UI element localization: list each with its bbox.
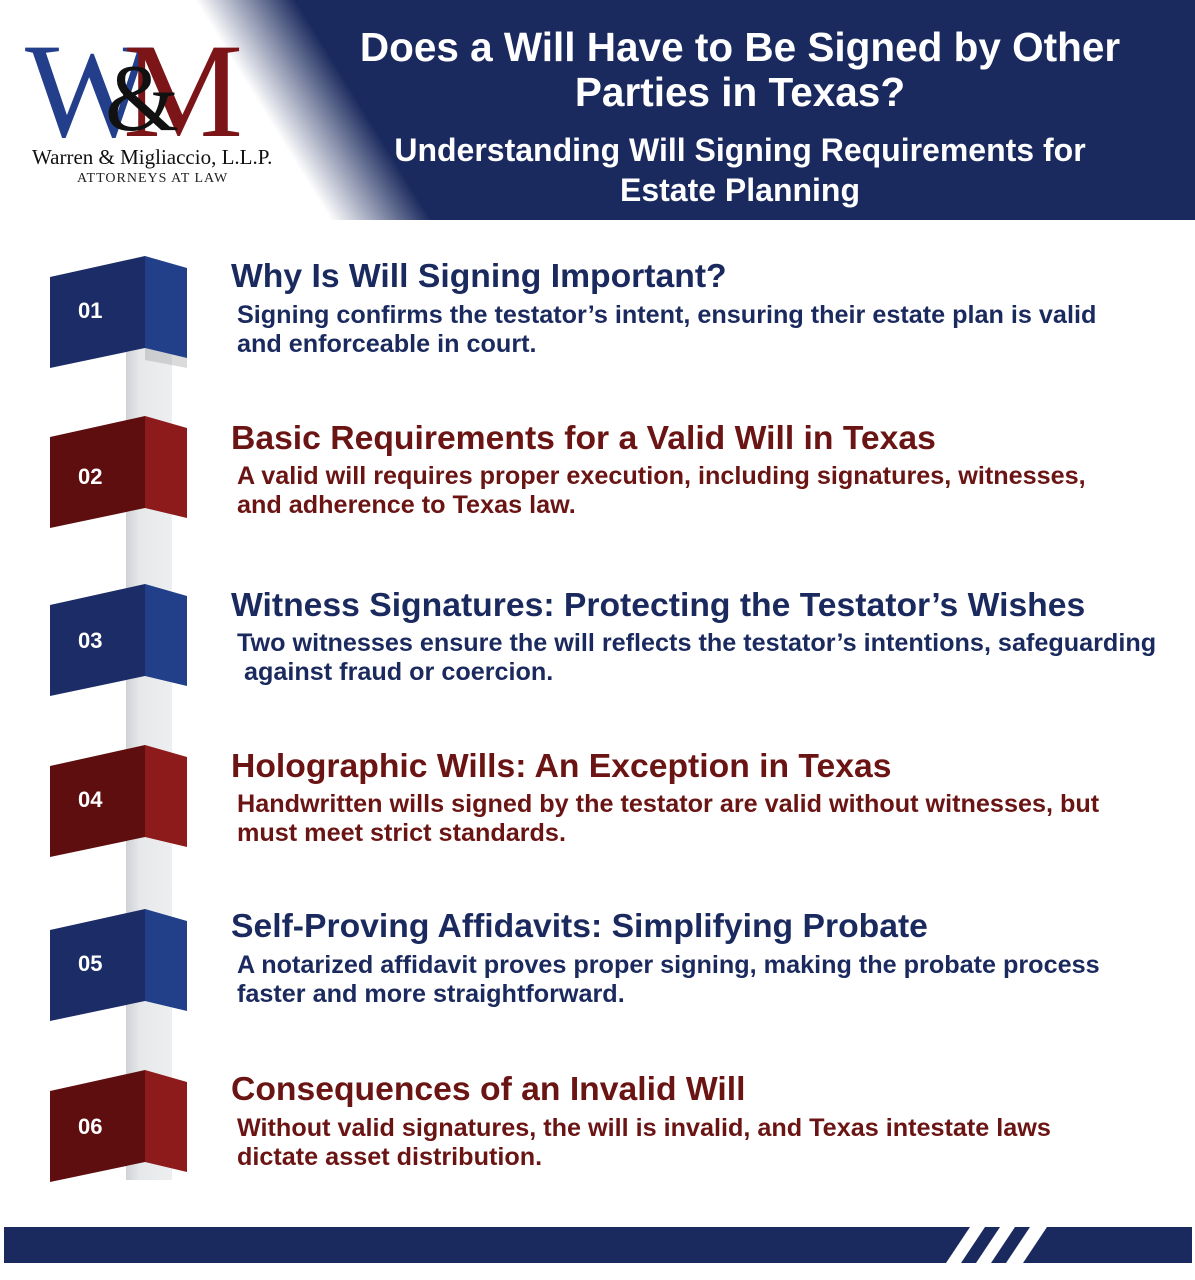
text 04: Handwritten wills signed by the testator are valid without witnesses, but <box>237 790 1099 818</box>
heading 04: Holographic Wills: An Exception in Texas <box>231 747 891 785</box>
marker 06 <box>50 1070 187 1182</box>
marker 02: 02 <box>78 464 102 489</box>
text 01: and enforceable in court. <box>237 330 537 358</box>
text 03: Two witnesses ensure the will reflects the testator’s intentions, safeguarding <box>237 629 1156 657</box>
text 04: must meet strict standards. <box>237 818 566 846</box>
marker 06: 06 <box>78 1114 102 1139</box>
subtitle: Estate Planning <box>620 172 860 208</box>
marker 04: 04 <box>78 787 103 812</box>
text 03: against fraud or coercion. <box>244 658 553 686</box>
subtitle <box>394 132 1086 208</box>
footer bar <box>4 1227 1192 1263</box>
heading 01: Why Is Will Signing Important? <box>231 257 727 295</box>
logo <box>25 30 272 186</box>
timeline pillar <box>126 300 172 1180</box>
marker 05 <box>50 909 187 1021</box>
title: Parties in Texas? <box>575 69 905 115</box>
marker 01: 01 <box>78 298 102 323</box>
heading 02: Basic Requirements for a Valid Will in Texas <box>231 419 936 457</box>
title: Does a Will Have to Be Signed by Other <box>360 24 1120 70</box>
title <box>360 24 1120 115</box>
text 06: Without valid signatures, the will is invalid, and Texas intestate laws <box>237 1114 1051 1142</box>
marker 01 <box>50 256 187 368</box>
marker 04 <box>50 745 187 857</box>
heading 06: Consequences of an Invalid Will <box>231 1070 745 1108</box>
marker 02 <box>50 416 187 528</box>
text 01 <box>237 301 1096 358</box>
text 02: and adherence to Texas law. <box>237 490 576 518</box>
logo: ATTORNEYS AT LAW <box>77 171 228 186</box>
text 06 <box>237 1114 1051 1170</box>
heading 05: Self-Proving Affidavits: Simplifying Probate <box>231 907 928 945</box>
text 05 <box>237 951 1100 1008</box>
text 02: A valid will requires proper execution, including signatures, witnesses, <box>237 462 1086 490</box>
text 05: faster and more straightforward. <box>237 980 625 1008</box>
logo: & <box>105 45 179 151</box>
subtitle: Understanding Will Signing Requirements for <box>394 132 1086 168</box>
heading 03: Witness Signatures: Protecting the Testator’s Wishes <box>231 586 1085 624</box>
logo: Warren & Migliaccio, L.L.P. <box>32 145 272 169</box>
marker 03: 03 <box>78 628 102 653</box>
text 02 <box>237 462 1086 518</box>
text 03 <box>237 629 1156 686</box>
marker 03 <box>50 584 187 696</box>
text 01: Signing confirms the testator’s intent, ensuring their estate plan is valid <box>237 301 1096 329</box>
header banner <box>199 0 1195 220</box>
text 05: A notarized affidavit proves proper signing, making the probate process <box>237 951 1100 979</box>
text 06: dictate asset distribution. <box>237 1142 542 1170</box>
marker 05: 05 <box>78 951 102 976</box>
text 04 <box>237 790 1099 846</box>
